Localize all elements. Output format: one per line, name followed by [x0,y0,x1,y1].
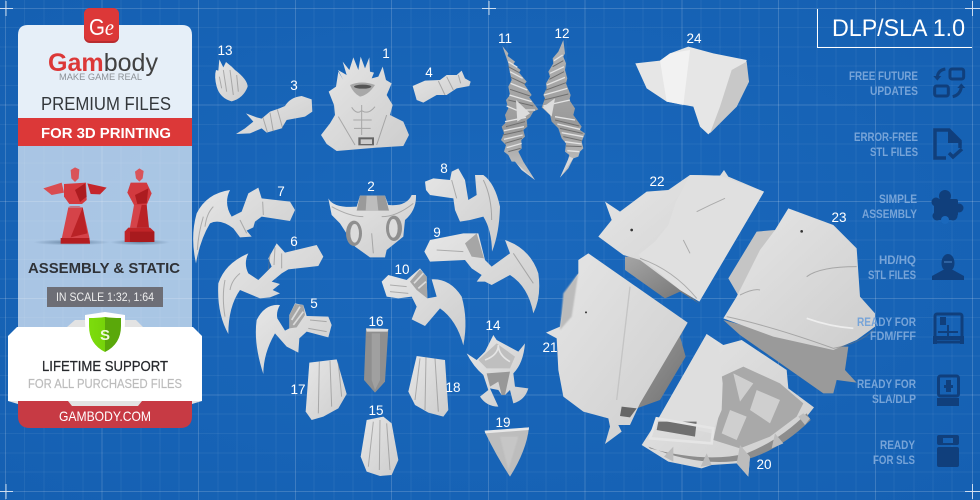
red banner [18,118,192,146]
part number labels: 23 [831,210,847,225]
brand wordmark: Gambody [48,49,158,77]
icon: bust [932,254,964,280]
logo badge [84,8,119,43]
panel lower area [18,146,192,406]
part 23: base quarter [723,208,875,393]
part 12: spiked horn [542,40,585,178]
icon: sla printer [937,376,959,406]
icon: sls printer [937,435,959,467]
feature: simple assembly: ASSEMBLY [862,209,917,221]
part 13: hair [215,59,248,101]
part number labels: 24 [686,31,702,46]
logo badge: Ge [89,14,114,40]
feature: hd/hq stl files [868,254,964,282]
premium files heading: PREMIUM FILES [41,94,171,114]
part 11: spiked horn [501,46,538,180]
part 1: bust [321,57,409,151]
icon: green shield [85,312,125,355]
part number labels: 8 [440,161,448,176]
red banner: FOR 3D PRINTING [41,125,171,142]
panel upper area [18,25,192,118]
part number labels: 14 [485,318,501,333]
part 10: wing with arm [382,268,465,345]
version title box [818,9,972,48]
part 7: wing with arm [193,188,295,263]
part 18: armor plate [408,356,448,417]
part number labels: 6 [290,234,298,249]
feature: ready for fdm/fff [857,314,964,344]
feature: error-free stl files: ERROR-FREE [854,132,918,144]
feature: ready for sls [873,435,959,467]
feature: ready for sls: READY [880,440,915,452]
part number labels: 20 [756,457,772,472]
purchased files text: FOR ALL PURCHASED FILES [28,376,182,391]
part number labels: 16 [368,314,384,329]
feature: free future updates [849,69,965,98]
part 16: armor plate [364,328,388,393]
feature: ready for sla/dlp [857,376,959,406]
lifetime support card [8,312,202,406]
icon: green shield: S [100,327,110,344]
part number labels: 21 [542,340,558,355]
part number labels [217,26,847,472]
red figurines [33,167,170,245]
feature: ready for fdm/fff: READY FOR [857,317,917,329]
part number labels: 2 [367,179,375,194]
icon: puzzle piece [932,190,964,224]
scale tag: IN SCALE 1:32, 1:64 [56,290,154,304]
part number labels: 4 [425,65,433,80]
footer button: GAMBODY.COM [59,408,151,424]
lifetime support text: LIFETIME SUPPORT [42,358,168,375]
part number labels: 11 [498,31,512,46]
footer button [18,400,192,428]
part number labels: 1 [382,46,390,61]
part 21: base quarter [546,253,688,444]
part number labels: 10 [394,262,410,277]
feature: ready for fdm/fff: FDM/FFF [870,331,916,343]
feature: simple assembly: SIMPLE [879,194,917,206]
part 9: wing with arm [424,233,539,313]
icon: swap arrows [933,69,965,97]
part 24: rock [635,47,749,134]
part 15: armor plate [361,417,398,476]
feature: hd/hq stl files: STL FILES [868,270,916,282]
feature: free future updates: UPDATES [870,86,918,98]
part number labels: 15 [368,403,384,418]
feature: ready for sla/dlp: SLA/DLP [872,394,916,406]
scale tag [47,287,163,307]
feature: error-free stl files [854,129,962,159]
assembly and static heading: ASSEMBLY & STATIC [28,260,180,277]
version title box: DLP/SLA 1.0 [832,15,965,42]
icon: file check [935,129,962,158]
part 19: triangular plate [485,427,529,477]
part 5: wing with arm [256,303,332,374]
part number labels: 12 [554,26,570,41]
part 20: base quarter [642,334,814,477]
part 14: face mask [467,335,528,407]
horn parts group [501,40,749,180]
lower parts: zoom-scale drawing group [218,233,539,477]
part number labels: 5 [310,296,318,311]
part number labels: 17 [290,382,306,397]
base parts group [546,170,875,477]
part number labels: 3 [290,78,298,93]
tagline: MAKE GAME REAL [59,72,142,83]
feature: free future updates: FREE FUTURE [849,71,918,83]
part number labels: 13 [217,43,233,58]
part 4: forearm [413,71,471,103]
icon: fdm printer [933,314,964,344]
feature: ready for sla/dlp: READY FOR [857,379,917,391]
feature: hd/hq stl files: HD/HQ [879,255,916,267]
part number labels: 9 [433,225,441,240]
feature: error-free stl files: STL FILES [870,147,918,159]
part 8: wing with arm [425,168,500,252]
feature: ready for sls: FOR SLS [873,455,915,467]
part 3: arm [236,96,312,134]
part number labels: 19 [495,415,511,430]
panel: Gambody sidebar [8,8,202,428]
part 6: wing with arm [218,243,323,334]
part number labels: 7 [277,184,285,199]
part 17: armor plate [306,359,347,420]
part number labels: 18 [445,380,461,395]
part 2: pelvis [328,195,416,257]
upper parts: zoom-scale drawing group [193,57,500,263]
feature: simple assembly [862,190,964,224]
part 22: base quarter [598,170,764,304]
part number labels: 22 [649,174,665,189]
